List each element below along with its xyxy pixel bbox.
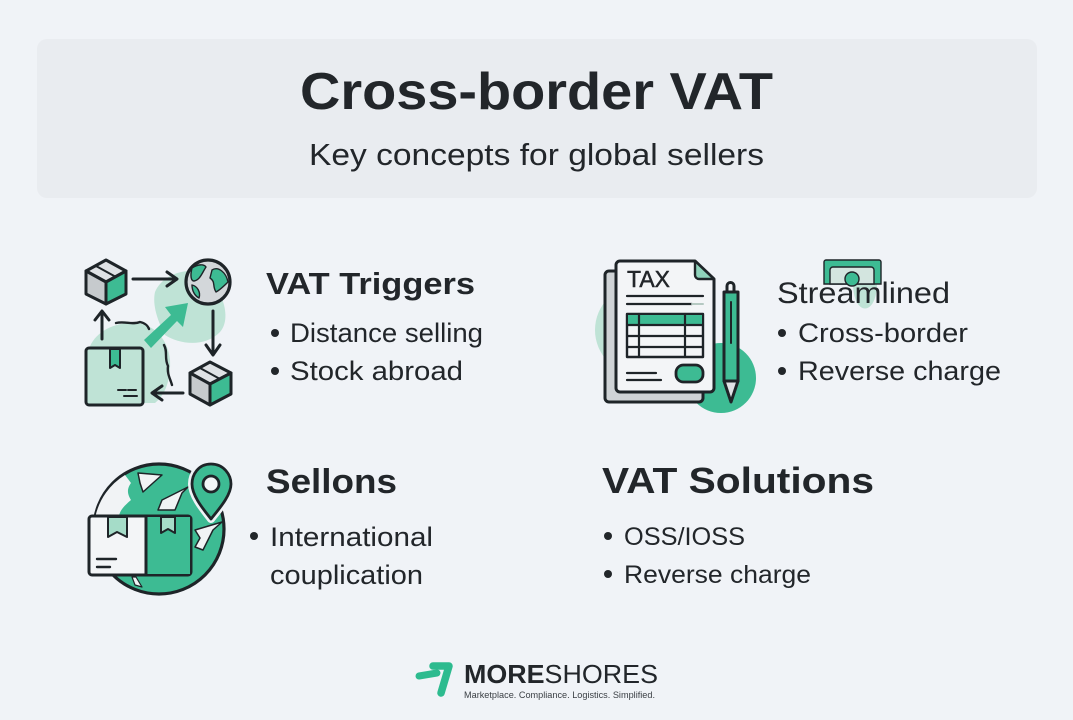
icon: pen [724,282,738,402]
arrow: parcel to top cube [95,311,109,339]
heading: Streamlined: Streamlined [777,277,950,310]
title: Cross-border VAT [300,63,773,121]
logo: MoreShores [419,659,658,701]
heading: VAT Solutions: VAT Solutions [602,460,874,501]
label: TAX: TAX [627,266,670,292]
icon: lower cube [190,362,231,405]
icon: shipping cycle with boxes and globe [86,260,231,405]
icon: banknote behind heading [824,260,881,308]
icon: top-left cube [86,260,126,304]
list: Streamlined: Cross-border [798,318,968,348]
document [616,261,714,392]
logo wordmark: MORESHORES [464,659,658,689]
list: VAT Triggers: Distance selling [290,318,483,348]
arrow: lower cube to parcel [152,386,183,400]
icon: globe with parcel and location pin [89,464,231,594]
list: Sellons: International [270,522,433,552]
logo tagline: Marketplace. Compliance. Logistics. Simplified. [464,690,655,701]
heading: Sellons: Sellons [266,463,397,501]
icon: tax document and pen [595,261,756,413]
arrow: cube to globe [133,272,177,286]
header panel [37,39,1037,198]
subtitle: Key concepts for global sellers [309,137,764,172]
location pin [192,464,231,519]
arrow: large green diagonal [144,303,188,348]
parcel [89,516,191,575]
dashed route lines [116,322,172,385]
list: Streamlined [778,318,1001,386]
arrow: globe to lower cube [206,311,220,355]
list: VAT Triggers [271,318,483,386]
icon: logo arrow [419,666,449,693]
icon: globe [186,260,230,304]
list: VAT Triggers: Stock abroad [290,356,463,386]
list: VAT Solutions [604,523,811,589]
list: VAT Solutions: Reverse charge [624,561,811,589]
list: VAT Solutions: OSS/IOSS [624,523,745,551]
heading: VAT Triggers: VAT Triggers [266,266,475,301]
table [627,314,703,357]
list: Sellons [250,522,433,590]
icon: parcel [86,348,143,405]
list: Sellons: couplication [270,560,423,590]
list: Streamlined: Reverse charge [798,356,1001,386]
